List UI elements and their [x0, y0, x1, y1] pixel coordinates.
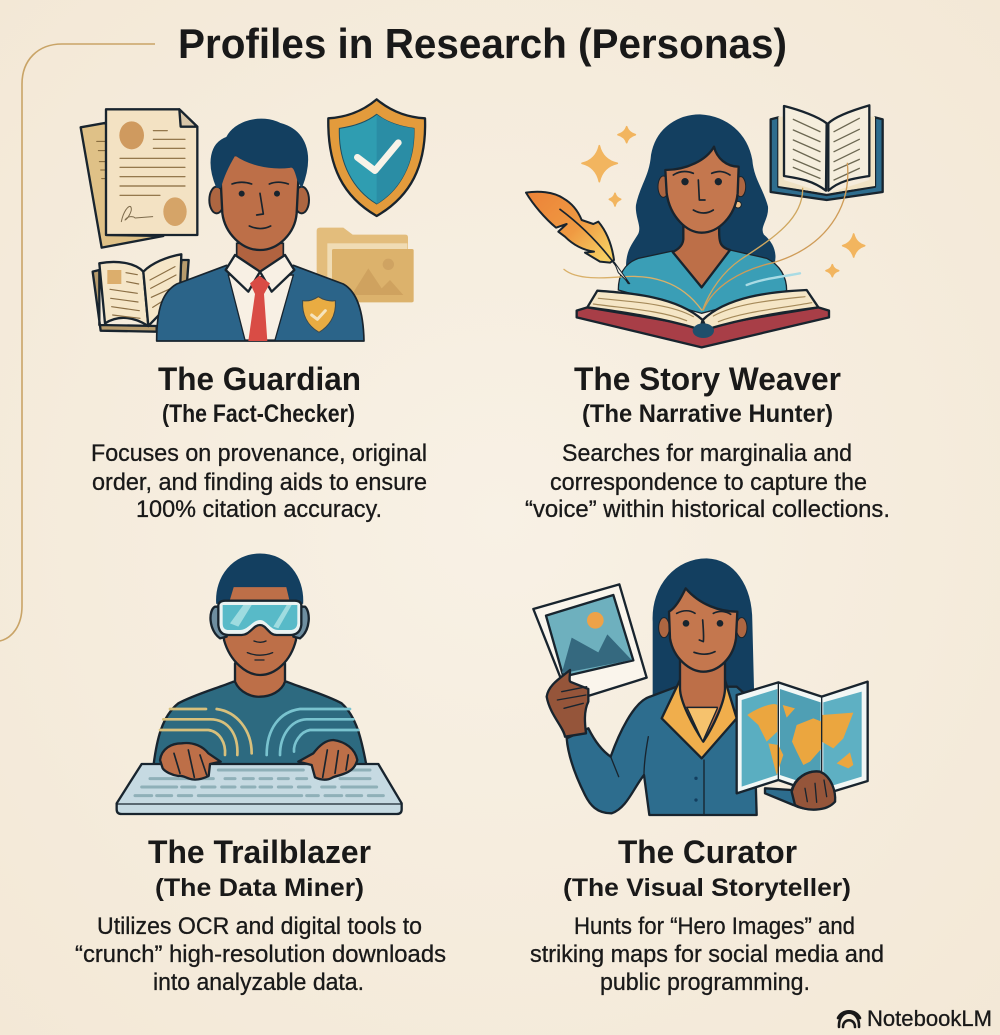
subheading: The Visual Storyteller: (The Visual Storyteller) — [563, 874, 851, 902]
description: Story Weaver: correspondence to capture the — [550, 469, 867, 496]
icon: quill — [526, 192, 630, 284]
description: Trailblazer — [75, 913, 446, 996]
icon: hand holding map — [765, 771, 835, 810]
description: Guardian: Focuses on provenance, original — [91, 440, 427, 467]
icon: keyboard — [117, 764, 402, 814]
illustration: curator with photo and map — [533, 559, 868, 815]
icon: large open book — [577, 290, 829, 347]
panel: The Story Weaver — [525, 105, 890, 523]
icon: flowing lines — [564, 163, 848, 310]
heading: The Story Weaver: The Story Weaver — [574, 361, 841, 397]
title: Profiles in Research (Personas) — [178, 20, 787, 67]
heading: The Trailblazer: The Trailblazer — [148, 834, 371, 870]
panel: The Curator — [530, 559, 884, 996]
heading: The Curator: The Curator — [618, 834, 797, 870]
icon: polaroid photo — [533, 584, 647, 702]
heading: The Guardian: The Guardian — [158, 361, 361, 397]
icon: flying open book — [771, 105, 883, 200]
icon: NotebookLM mark — [838, 1011, 860, 1027]
description: Guardian: order, and finding aids to ensure — [92, 469, 427, 496]
logo: NotebookLM: NotebookLM — [867, 1006, 992, 1031]
icon: certified documents — [81, 109, 197, 248]
description: Story Weaver: Searches for marginalia and — [562, 440, 852, 467]
figure: story weaver — [618, 115, 787, 313]
illustration: trailblazer at keyboard — [117, 554, 402, 814]
description: Curator — [530, 913, 884, 996]
icon: hand holding photo — [547, 670, 588, 737]
figure: guardian — [157, 119, 364, 341]
icon: shield with check — [328, 99, 425, 216]
panel: The Trailblazer — [75, 554, 446, 996]
description: Trailblazer: Utilizes OCR and digital tools to — [97, 913, 422, 940]
description: Guardian: 100% citation accuracy. — [136, 496, 382, 523]
icon: world map — [737, 682, 868, 795]
description: Story Weaver: “voice” within historical collections. — [525, 496, 890, 523]
icon: image folder — [317, 228, 414, 302]
icon: sparkles — [582, 127, 865, 277]
description: Trailblazer: “crunch” high-resolution downloads — [75, 941, 446, 968]
subheading: The Fact-Checker: (The Fact-Checker) — [162, 400, 355, 428]
description: Curator: Hunts for “Hero Images” and — [574, 913, 855, 940]
panel: The Guardian — [81, 99, 427, 523]
description: Guardian — [91, 440, 427, 523]
figure: trailblazer — [153, 554, 367, 767]
figure: curator — [567, 559, 757, 815]
icon: hands — [160, 740, 357, 780]
description: Story Weaver — [525, 440, 890, 523]
illustration: story weaver with books and quill — [526, 105, 883, 347]
subheading: The Narrative Hunter: (The Narrative Hunter) — [582, 400, 833, 428]
subheading: The Data Miner: (The Data Miner) — [155, 874, 364, 902]
icon: open book — [93, 254, 189, 332]
illustration: guardian with documents and shield — [81, 99, 425, 341]
description: Curator: striking maps for social media and — [530, 941, 884, 968]
description: Curator: public programming. — [600, 969, 810, 996]
description: Trailblazer: into analyzable data. — [153, 969, 364, 996]
